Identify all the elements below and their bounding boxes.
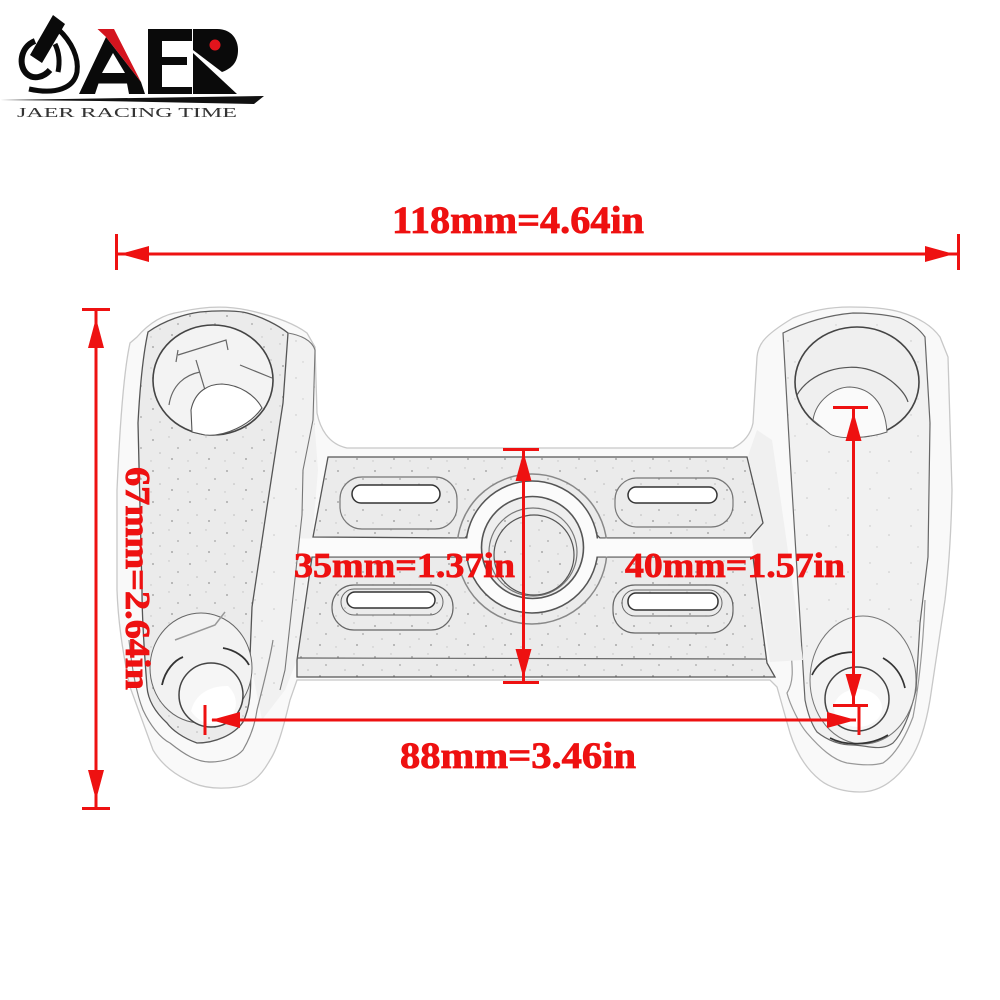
right side band (748, 430, 803, 662)
dimension: overall width 118mm: 118mm=4.64in (392, 198, 644, 242)
left arm (138, 311, 288, 743)
right lower contour (787, 600, 925, 765)
plate inner bottom line (297, 658, 767, 659)
hole: upper left (153, 325, 273, 435)
dimension: overall width 118mm (115, 198, 960, 270)
left arm edge (280, 333, 315, 690)
dimension: 40mm hole spacing: 40mm=1.57in (625, 546, 845, 585)
central hub ring (300, 474, 752, 624)
logo: JAER Racing Time (0, 15, 264, 121)
dimension: 35mm plate depth: 35mm=1.37in (294, 546, 515, 585)
hole: upper right (795, 327, 919, 438)
left arm side band (250, 333, 318, 720)
part outer silhouette (117, 307, 952, 792)
central plate lower section (297, 557, 775, 677)
icon: logo emblem (22, 15, 77, 91)
dimension: 35mm plate depth (294, 448, 539, 684)
dimension: overall height 67mm: 67mm=2.64in (118, 467, 157, 690)
dimension: 88mm hole spacing: 88mm=3.46in (400, 736, 636, 777)
logo letter E (148, 29, 192, 94)
central plate upper section (313, 457, 763, 538)
hole: lower left (150, 612, 252, 727)
logo letter R (193, 29, 238, 94)
right arm (783, 313, 930, 748)
slot: upper right (615, 478, 733, 527)
dimension: 88mm hole spacing (204, 705, 860, 777)
slot: upper left (340, 477, 457, 529)
hole: lower right (810, 616, 916, 744)
dimension: overall height 67mm (82, 308, 157, 810)
slot: lower left (332, 585, 453, 630)
dimension: 40mm hole spacing (625, 406, 868, 707)
left lower contour (129, 640, 273, 762)
slot: lower right (613, 585, 733, 633)
logo swoosh (0, 96, 264, 104)
logo tagline: JAER RACING TIME (17, 106, 237, 121)
logo letter A (79, 29, 145, 94)
part drawing: riser top clamp (117, 307, 952, 792)
